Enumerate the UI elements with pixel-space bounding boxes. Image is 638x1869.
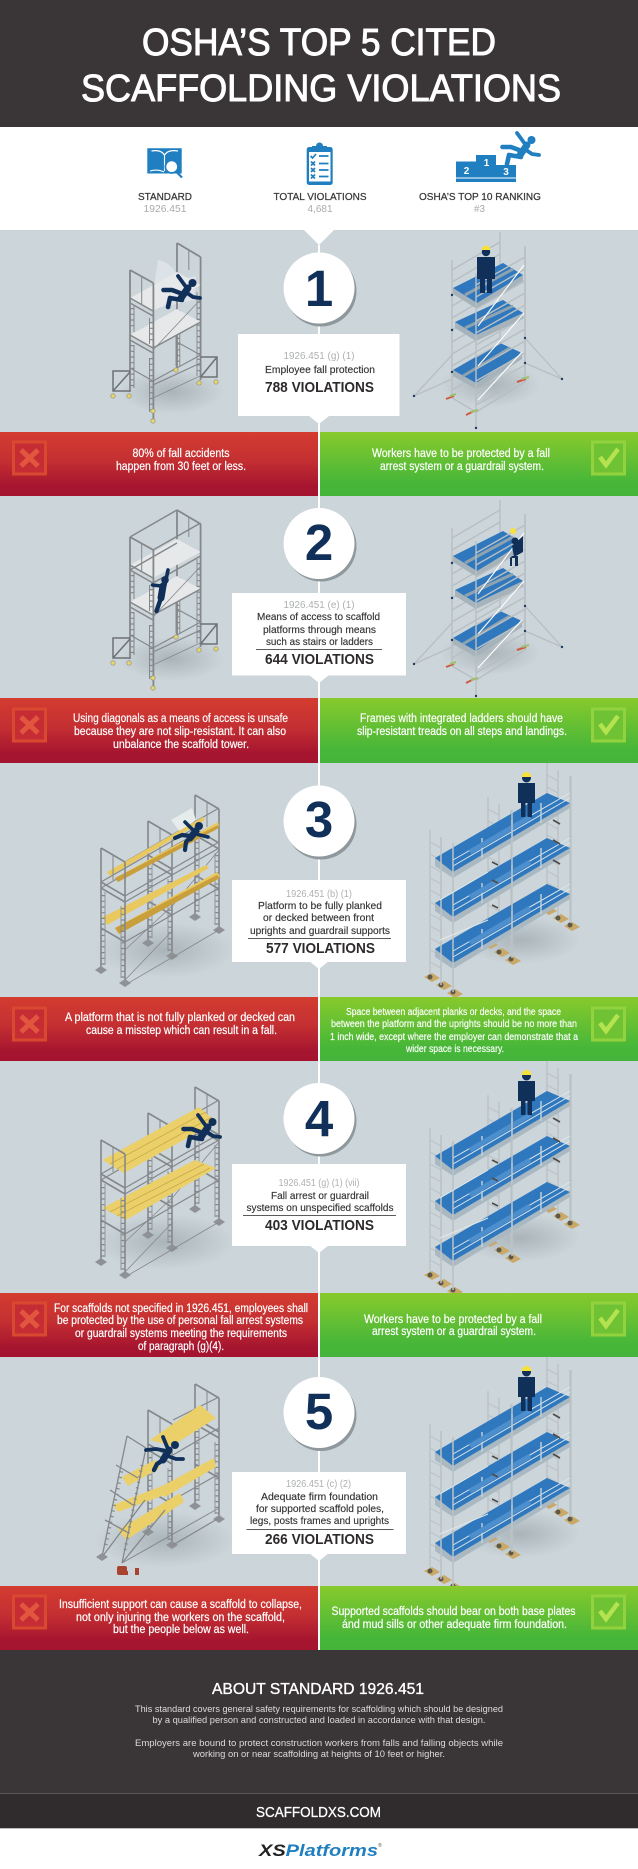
about heading: ABOUT STANDARD 1926.451 [212, 1681, 424, 1698]
stat: total violations: 4,681 [308, 203, 333, 215]
callout box 5: Adequate firm foundation [261, 1491, 378, 1503]
illustration: unsafe tower with climbing worker [111, 510, 224, 690]
red band 4: or guardrail systems meeting the requirements [75, 1328, 287, 1340]
panel: violation 2 [0, 500, 638, 763]
panel: violation 4 [0, 1061, 638, 1357]
green band 4: Workers have to be protected by a fall [364, 1314, 542, 1326]
illustration: safe scaffold with blue decks [424, 763, 580, 998]
about body text [135, 1704, 503, 1760]
callout box 2: platforms through means [263, 624, 376, 636]
callout box 5: 266 VIOLATIONS [265, 1531, 374, 1548]
red band 3: A platform that is not fully planked or decked can [65, 1012, 295, 1024]
number badge 1: 1 [305, 260, 333, 317]
logo [0, 1828, 638, 1860]
callout box 2: 1926.451 (e) (1) [284, 600, 354, 611]
callout box 3: Platform to be fully planked [258, 900, 382, 912]
green band 3 [320, 997, 638, 1061]
green band 3: Space between adjacent planks or decks, and the space [346, 1007, 561, 1018]
callout box 4: Fall arrest or guardrail [271, 1190, 369, 1202]
red band 5: but the people below as well. [113, 1624, 249, 1636]
background panel [0, 230, 638, 1650]
logo: XS Platforms [258, 1842, 378, 1860]
icon: podium with falling person: 2 [464, 166, 470, 177]
callout box 1 [238, 334, 400, 424]
callout box 4: systems on unspecified scaffolds [246, 1202, 394, 1214]
callout box 1: 1926.451 (g) (1) [284, 351, 354, 362]
red band 2: unbalance the scaffold tower. [113, 739, 249, 751]
red band 4 [0, 1293, 318, 1357]
red band 2 [0, 698, 318, 763]
green band 4: arrest system or a guardrail system. [372, 1326, 536, 1338]
icon: check box [592, 442, 624, 474]
callout box 4: 403 VIOLATIONS [265, 1217, 374, 1234]
callout box 3: uprights and guardrail supports [250, 925, 390, 937]
stat: standard: STANDARD [138, 191, 192, 203]
illustration: safe scaffold with blue decks [424, 1061, 580, 1296]
callout box 3 [232, 880, 406, 969]
icon: podium with falling person [456, 133, 539, 182]
callout box 2 [232, 593, 406, 683]
icon: book with magnifier [147, 148, 182, 178]
header banner [0, 0, 638, 127]
red band 2: Using diagonals as a means of access is unsafe [73, 713, 288, 725]
illustration: safe tower with worker [413, 232, 563, 429]
green band 2: Frames with integrated ladders should have [360, 713, 563, 725]
callout box 2: such as stairs or ladders [266, 636, 373, 648]
callout box 5: for supported scaffold poles, [256, 1503, 384, 1515]
red band 5: not only injuring the workers on the scaffold, [76, 1612, 285, 1624]
illustration: safe scaffold with blue decks [424, 1357, 580, 1592]
red band 1: 80% of fall accidents [132, 448, 230, 460]
stat: standard [138, 148, 192, 215]
callout box 3: or decked between front [263, 912, 374, 924]
green band 5 [320, 1586, 638, 1650]
illustration: unsafe tower with falling worker [111, 243, 224, 423]
illustration: partly planked scaffold with falling worker [95, 795, 235, 987]
panel: violation 3 [0, 763, 638, 1061]
icon: check box [592, 1303, 624, 1335]
panel: violation 1 [0, 232, 638, 496]
callout box 3: 577 VIOLATIONS [266, 940, 375, 957]
stat: ranking: OSHA’S TOP 10 RANKING [419, 191, 541, 203]
title [81, 22, 561, 110]
illustration: collapsing scaffold with falling worker [95, 1384, 235, 1575]
website bar: SCAFFOLDXS.COM [256, 1804, 381, 1821]
about body text: This standard covers general safety requirements for scaffolding which should be designed [135, 1704, 503, 1715]
about body text: by a qualified person and constructed and loaded in accordance with that design. [152, 1715, 486, 1726]
stat: ranking: #3 [474, 203, 485, 215]
red band 5: Insufficient support can cause a scaffold to collapse, [59, 1599, 302, 1611]
callout box 1: Employee fall protection [265, 364, 375, 376]
icon: check box [592, 1008, 624, 1040]
number badge 3 [284, 786, 356, 860]
stat: total violations: TOTAL VIOLATIONS [274, 191, 366, 203]
green band 1 [320, 432, 638, 496]
red band 3 [0, 997, 318, 1061]
callout box 4 [232, 1164, 406, 1253]
callout box 5: 1926.451 (c) (2) [286, 1479, 351, 1490]
green band 5: ánd mud sills or other adequate firm foundation. [342, 1619, 567, 1631]
green band 3: between the platform and the uprights should be no more than [331, 1019, 577, 1030]
green band 2 [320, 698, 638, 763]
title: SCAFFOLDING VIOLATIONS [81, 68, 561, 110]
icon: check box [592, 709, 624, 741]
green band 3: 1 inch wide, except where the employer can demonstrate that a [330, 1032, 578, 1043]
callout box 5: legs, posts frames and uprights [250, 1515, 389, 1527]
icon: podium with falling person: 3 [503, 167, 509, 178]
number badge 4 [284, 1083, 356, 1156]
green band 4 [320, 1293, 638, 1357]
stat: total violations [274, 142, 366, 215]
number badge 3: 3 [305, 791, 333, 848]
website bar [0, 1793, 638, 1828]
icon: x box [14, 709, 46, 741]
callout box 2: 644 VIOLATIONS [265, 651, 374, 668]
icon: podium with falling person: 1 [484, 158, 490, 169]
callout box 1: 788 VIOLATIONS [265, 379, 374, 396]
number badge 2: 2 [305, 514, 333, 571]
green band 1: Workers have to be protected by a fall [372, 448, 550, 460]
callout box 4: 1926.451 (g) (1) (vii) [278, 1178, 360, 1189]
stat: ranking [419, 133, 541, 215]
number badge 4: 4 [305, 1090, 334, 1147]
green band 2: slip-resistant treads on all steps and landings. [357, 726, 567, 738]
red band 5 [0, 1586, 318, 1650]
logo: ® [378, 1842, 382, 1849]
title: OSHA’S TOP 5 CITED [142, 22, 496, 64]
number badge 5: 5 [305, 1383, 333, 1440]
icon: x box [14, 1596, 46, 1628]
panel: violation 5 [0, 1357, 638, 1650]
red band 4: For scaffolds not specified in 1926.451, employees shall [54, 1303, 308, 1315]
about body text: Employers are bound to protect construction workers from falls and falling objects while [135, 1738, 503, 1749]
callout box 3: 1926.451 (b) (1) [286, 889, 352, 900]
icon: x box [14, 442, 46, 474]
icon: check box [592, 1596, 624, 1628]
green band 3: wider space is necessary. [405, 1044, 504, 1055]
illustration: scaffold without guardrail with falling worker [95, 1087, 235, 1279]
green band 5: Supported scaffolds should bear on both base plates [332, 1606, 576, 1618]
icon: x box [14, 1303, 46, 1335]
icon: clipboard [307, 142, 333, 185]
number badge 2 [284, 508, 356, 582]
about body text: working on or near scaffolding at heights of 10 feet or higher. [192, 1749, 445, 1760]
about panel [0, 1650, 638, 1793]
icon: x box [14, 1008, 46, 1040]
red band 1 [0, 432, 318, 496]
number badge 1 [284, 252, 356, 326]
red band 1: happen from 30 feet or less. [116, 461, 246, 473]
red band 2: because they are not slip-resistant. It can also [74, 726, 286, 738]
callout box 5 [232, 1472, 406, 1561]
callout box 2: Means of access to scaffold [257, 611, 380, 623]
red band 4: of paragraph (g)(4). [138, 1341, 224, 1353]
red band 4: be protected by the use of personal fall arrest systems [57, 1315, 303, 1327]
number badge 5 [284, 1377, 356, 1451]
illustration: safe tower with worker on side [413, 500, 563, 697]
red band 3: cause a misstep which can result in a fall. [86, 1025, 277, 1037]
green band 1: arrest system or a guardrail system. [380, 461, 544, 473]
pointer notch [304, 230, 334, 245]
stat: standard: 1926.451 [144, 203, 187, 215]
